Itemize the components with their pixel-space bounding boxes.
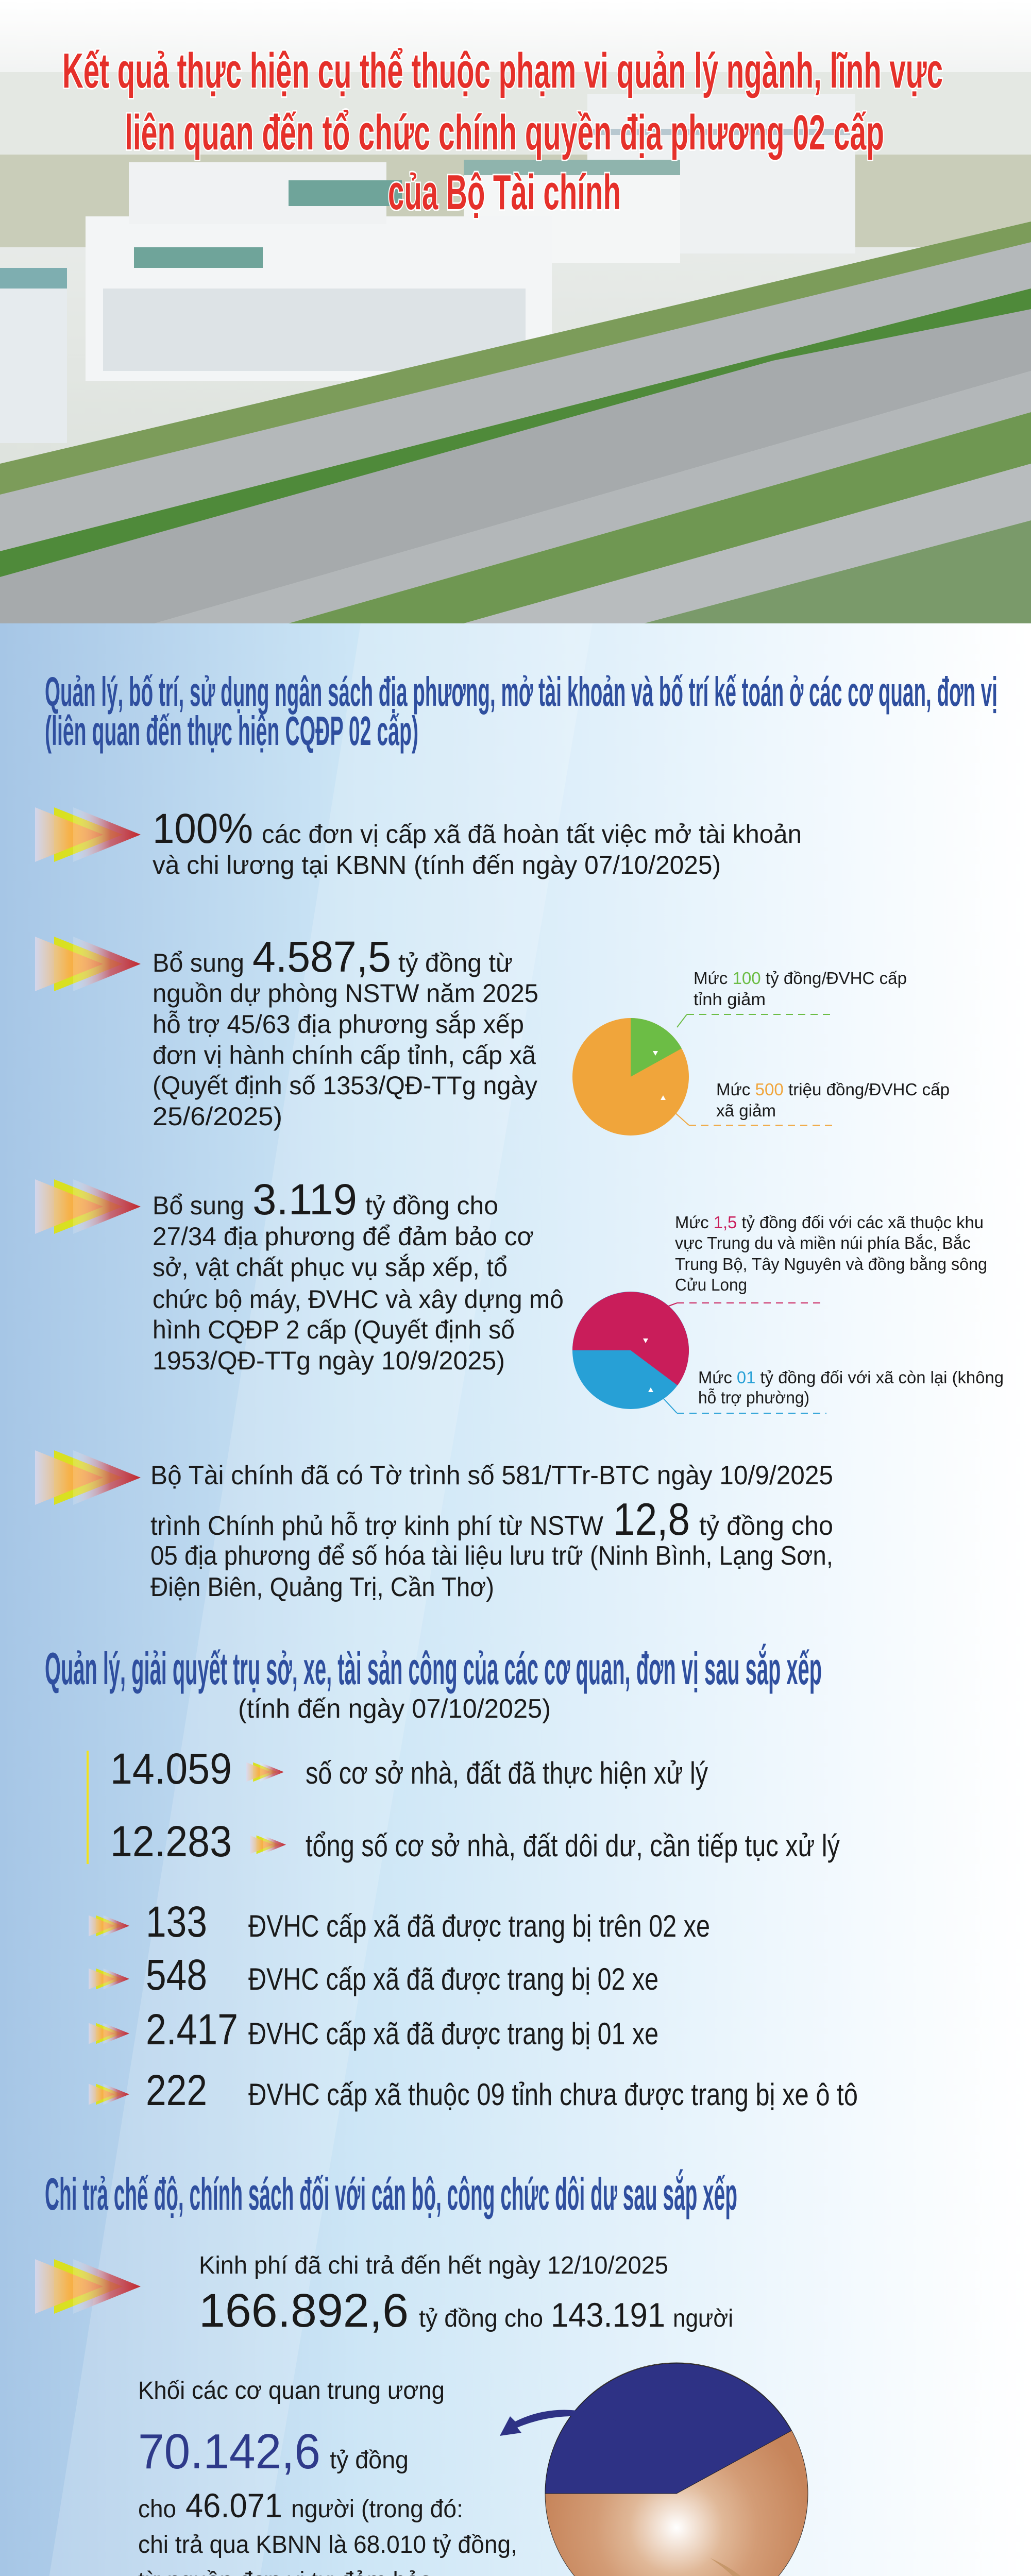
- pie chart 2: hỗ trợ phường): [698, 1388, 809, 1407]
- item 3: 3.119 billion: Bổ sung: [153, 1191, 244, 1220]
- title: của Bộ Tài chính: [388, 165, 621, 220]
- item 4: 12,8 billion digitisation: Điện Biên, Quảng Trị, Cần Thơ): [150, 1572, 494, 1602]
- pie chart 2: vực Trung du và miền núi phía Bắc, Bắc: [675, 1233, 971, 1252]
- central agencies text: [138, 2377, 517, 2576]
- icon: arrow: [35, 937, 141, 991]
- icon: arrow: [35, 2259, 141, 2314]
- pie chart 3: [545, 2363, 808, 2576]
- item 4: 12,8 billion digitisation: Bộ Tài chính đã có Tờ trình số 581/TTr-BTC ngày 10/9/2025: [150, 1461, 833, 1490]
- pie chart 2: Mức 1,5 tỷ đồng đối với các xã thuộc khu: [675, 1213, 984, 1232]
- pie chart 1: xã giảm: [716, 1101, 776, 1120]
- stats: vehicles: 222: [146, 2066, 207, 2114]
- arrow: navy curved: [500, 2410, 618, 2436]
- stats: vehicles: 548: [146, 1951, 207, 1999]
- stats: houses and land: [87, 1744, 840, 1866]
- central agencies text: chi trả qua KBNN là 68.010 tỷ đồng,: [138, 2531, 517, 2558]
- total payment: 143.191: [551, 2296, 665, 2334]
- central agencies text: tỷ đồng: [330, 2447, 409, 2474]
- item 3: 3.119 billion: tỷ đồng cho: [365, 1191, 498, 1220]
- pie chart 2: Mức 01 tỷ đồng đối với xã còn lại (không: [698, 1368, 1004, 1387]
- stats: vehicles: ĐVHC cấp xã thuộc 09 tỉnh chưa được trang bị xe ô tô: [248, 2077, 858, 2112]
- item 2: 4.587,5 billion: 4.587,5: [252, 933, 391, 981]
- item 4: 12,8 billion digitisation: [35, 1450, 833, 1602]
- stats: vehicles: ĐVHC cấp xã đã được trang bị 01 xe: [248, 2016, 658, 2051]
- central agencies text: 70.142,6: [138, 2424, 320, 2479]
- heading: section 2: [45, 1643, 822, 1724]
- item 2: 4.587,5 billion: (Quyết định số 1353/QĐ-TTg ngày: [153, 1071, 537, 1100]
- pie chart 2: [572, 1213, 1004, 1413]
- stats: houses and land: 14.059: [110, 1744, 232, 1793]
- item 4: 12,8 billion digitisation: 12,8: [613, 1494, 690, 1545]
- item 3: 3.119 billion: 27/34 địa phương để đảm bảo cơ: [153, 1222, 534, 1251]
- item 3: 3.119 billion: chức bộ máy, ĐVHC và xây dựng mô: [153, 1285, 564, 1314]
- pie chart 2: Trung Bộ, Tây Nguyên và đồng bằng sông: [675, 1255, 987, 1274]
- stats: vehicles: ĐVHC cấp xã đã được trang bị 02 xe: [248, 1962, 658, 1996]
- item 3: 3.119 billion: 3.119: [252, 1175, 357, 1224]
- title: [62, 43, 943, 220]
- item 3: 3.119 billion: sở, vật chất phục vụ sắp xếp, tổ: [153, 1253, 508, 1282]
- item 2: 4.587,5 billion: nguồn dự phòng NSTW năm 2025: [153, 979, 538, 1008]
- item 2: 4.587,5 billion: 25/6/2025): [153, 1102, 282, 1131]
- total payment: người: [673, 2305, 733, 2332]
- icon: arrow: [35, 1179, 141, 1234]
- heading: section 2: (tính đến ngày 07/10/2025): [238, 1694, 551, 1724]
- stats: vehicles: ĐVHC cấp xã đã được trang bị trên 02 xe: [248, 1909, 710, 1943]
- pie chart 1: [572, 969, 950, 1136]
- item 1: 100% accounts: và chi lương tại KBNN (tính đến ngày 07/10/2025): [153, 851, 721, 879]
- item 4: 12,8 billion digitisation: tỷ đồng cho: [699, 1511, 833, 1541]
- total payment: Kinh phí đã chi trả đến hết ngày 12/10/2025: [199, 2252, 668, 2279]
- item 4: 12,8 billion digitisation: trình Chính phủ hỗ trợ kinh phí từ NSTW: [150, 1511, 603, 1541]
- pie chart 2: Cửu Long: [675, 1275, 747, 1294]
- total payment: tỷ đồng cho: [419, 2305, 543, 2332]
- stats: houses and land: số cơ sở nhà, đất đã thực hiện xử lý: [306, 1756, 708, 1790]
- total payment: 166.892,6: [199, 2284, 409, 2337]
- heading: section 1: (liên quan đến thực hiện CQĐP 02 cấp): [45, 708, 418, 754]
- item 3: 3.119 billion: 1953/QĐ-TTg ngày 10/9/2025): [153, 1346, 505, 1375]
- icon: arrow: [35, 1450, 141, 1505]
- item 3: 3.119 billion: hình CQĐP 2 cấp (Quyết định số: [153, 1315, 515, 1344]
- item 2: 4.587,5 billion: Bổ sung: [153, 948, 244, 977]
- item 4: 12,8 billion digitisation: 05 địa phương để số hóa tài liệu lưu trữ (Ninh Bình, Lạng Sơn,: [150, 1541, 833, 1571]
- central agencies text: 46.071: [185, 2486, 282, 2524]
- central agencies text: Khối các cơ quan trung ương: [138, 2377, 445, 2404]
- pie chart 1: Mức 500 triệu đồng/ĐVHC cấp: [716, 1080, 950, 1099]
- item 2: 4.587,5 billion: tỷ đồng từ: [398, 948, 513, 977]
- pie chart 1: tỉnh giảm: [694, 990, 766, 1009]
- item 3: 3.119 billion: [35, 1175, 564, 1375]
- heading: section 1: [45, 669, 998, 754]
- stats: houses and land: 12.283: [110, 1817, 232, 1866]
- stats: vehicles: 133: [146, 1897, 207, 1946]
- item 1: 100% accounts: [35, 805, 802, 879]
- icon: arrow: [35, 807, 141, 862]
- item 1: 100% accounts: 100%: [153, 805, 253, 852]
- central agencies text: cho: [138, 2496, 176, 2523]
- total payment: [35, 2252, 733, 2337]
- arrow: copper curved: [710, 2558, 787, 2576]
- stats: vehicles: 2.417: [146, 2005, 238, 2054]
- stats: houses and land: tổng số cơ sở nhà, đất dôi dư, cần tiếp tục xử lý: [306, 1828, 840, 1863]
- stats: vehicles: [89, 1897, 858, 2114]
- photo: city street: [0, 0, 1031, 623]
- pie chart 1: Mức 100 tỷ đồng/ĐVHC cấp: [694, 969, 907, 988]
- item 2: 4.587,5 billion: đơn vị hành chính cấp tỉnh, cấp xã: [153, 1041, 536, 1070]
- central agencies text: người (trong đó:: [291, 2496, 463, 2523]
- item 1: 100% accounts: các đơn vị cấp xã đã hoàn tất việc mở tài khoản: [262, 820, 802, 849]
- item 2: 4.587,5 billion: [35, 933, 538, 1131]
- item 2: 4.587,5 billion: hỗ trợ 45/63 địa phương sắp xếp: [153, 1010, 524, 1039]
